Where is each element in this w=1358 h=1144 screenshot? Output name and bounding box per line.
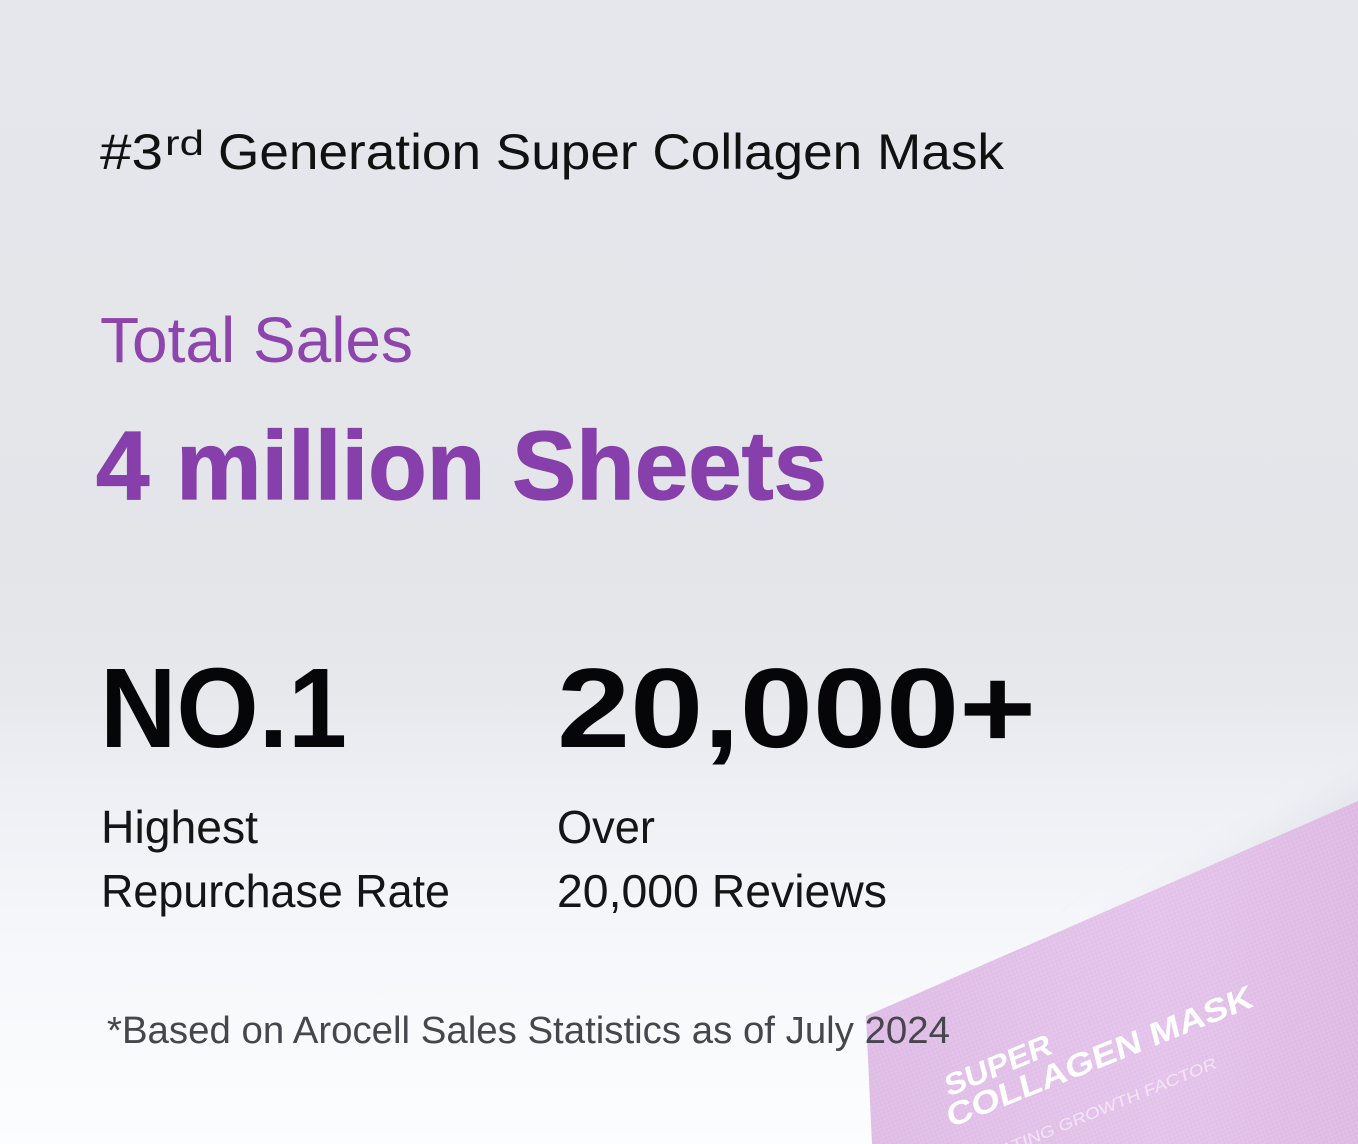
label: total sales: Total Sales <box>100 304 413 376</box>
heading: generation: Generation Super Collagen Mask <box>218 124 1005 180</box>
stat caption: highest repurchase rate: Repurchase Rate <box>101 865 450 917</box>
stat caption: highest repurchase rate: Highest <box>101 801 258 853</box>
stat caption: over 20,000 reviews: Over <box>557 801 655 853</box>
box label: SUPER: SUPER <box>941 1028 1055 1104</box>
stat: reviews <box>557 645 1036 917</box>
stat value: NO.1: NO.1 <box>100 645 347 771</box>
footnote: *Based on Arocell Sales Statistics as of July 2024 <box>107 1010 950 1052</box>
box label: COLLAGEN MASK: COLLAGEN MASK <box>943 978 1256 1135</box>
heading: generation: #3 <box>100 124 163 180</box>
product image: mask box <box>866 801 1358 1144</box>
headline: 4 million sheets: 4 million Sheets <box>96 411 827 520</box>
product shadow sheen <box>1040 760 1358 945</box>
stat value: 20,000+: 20,000+ <box>557 645 1036 771</box>
stat: no.1 <box>100 645 450 917</box>
stat caption: over 20,000 reviews: 20,000 Reviews <box>557 865 887 917</box>
heading: generation: rd <box>165 124 204 163</box>
